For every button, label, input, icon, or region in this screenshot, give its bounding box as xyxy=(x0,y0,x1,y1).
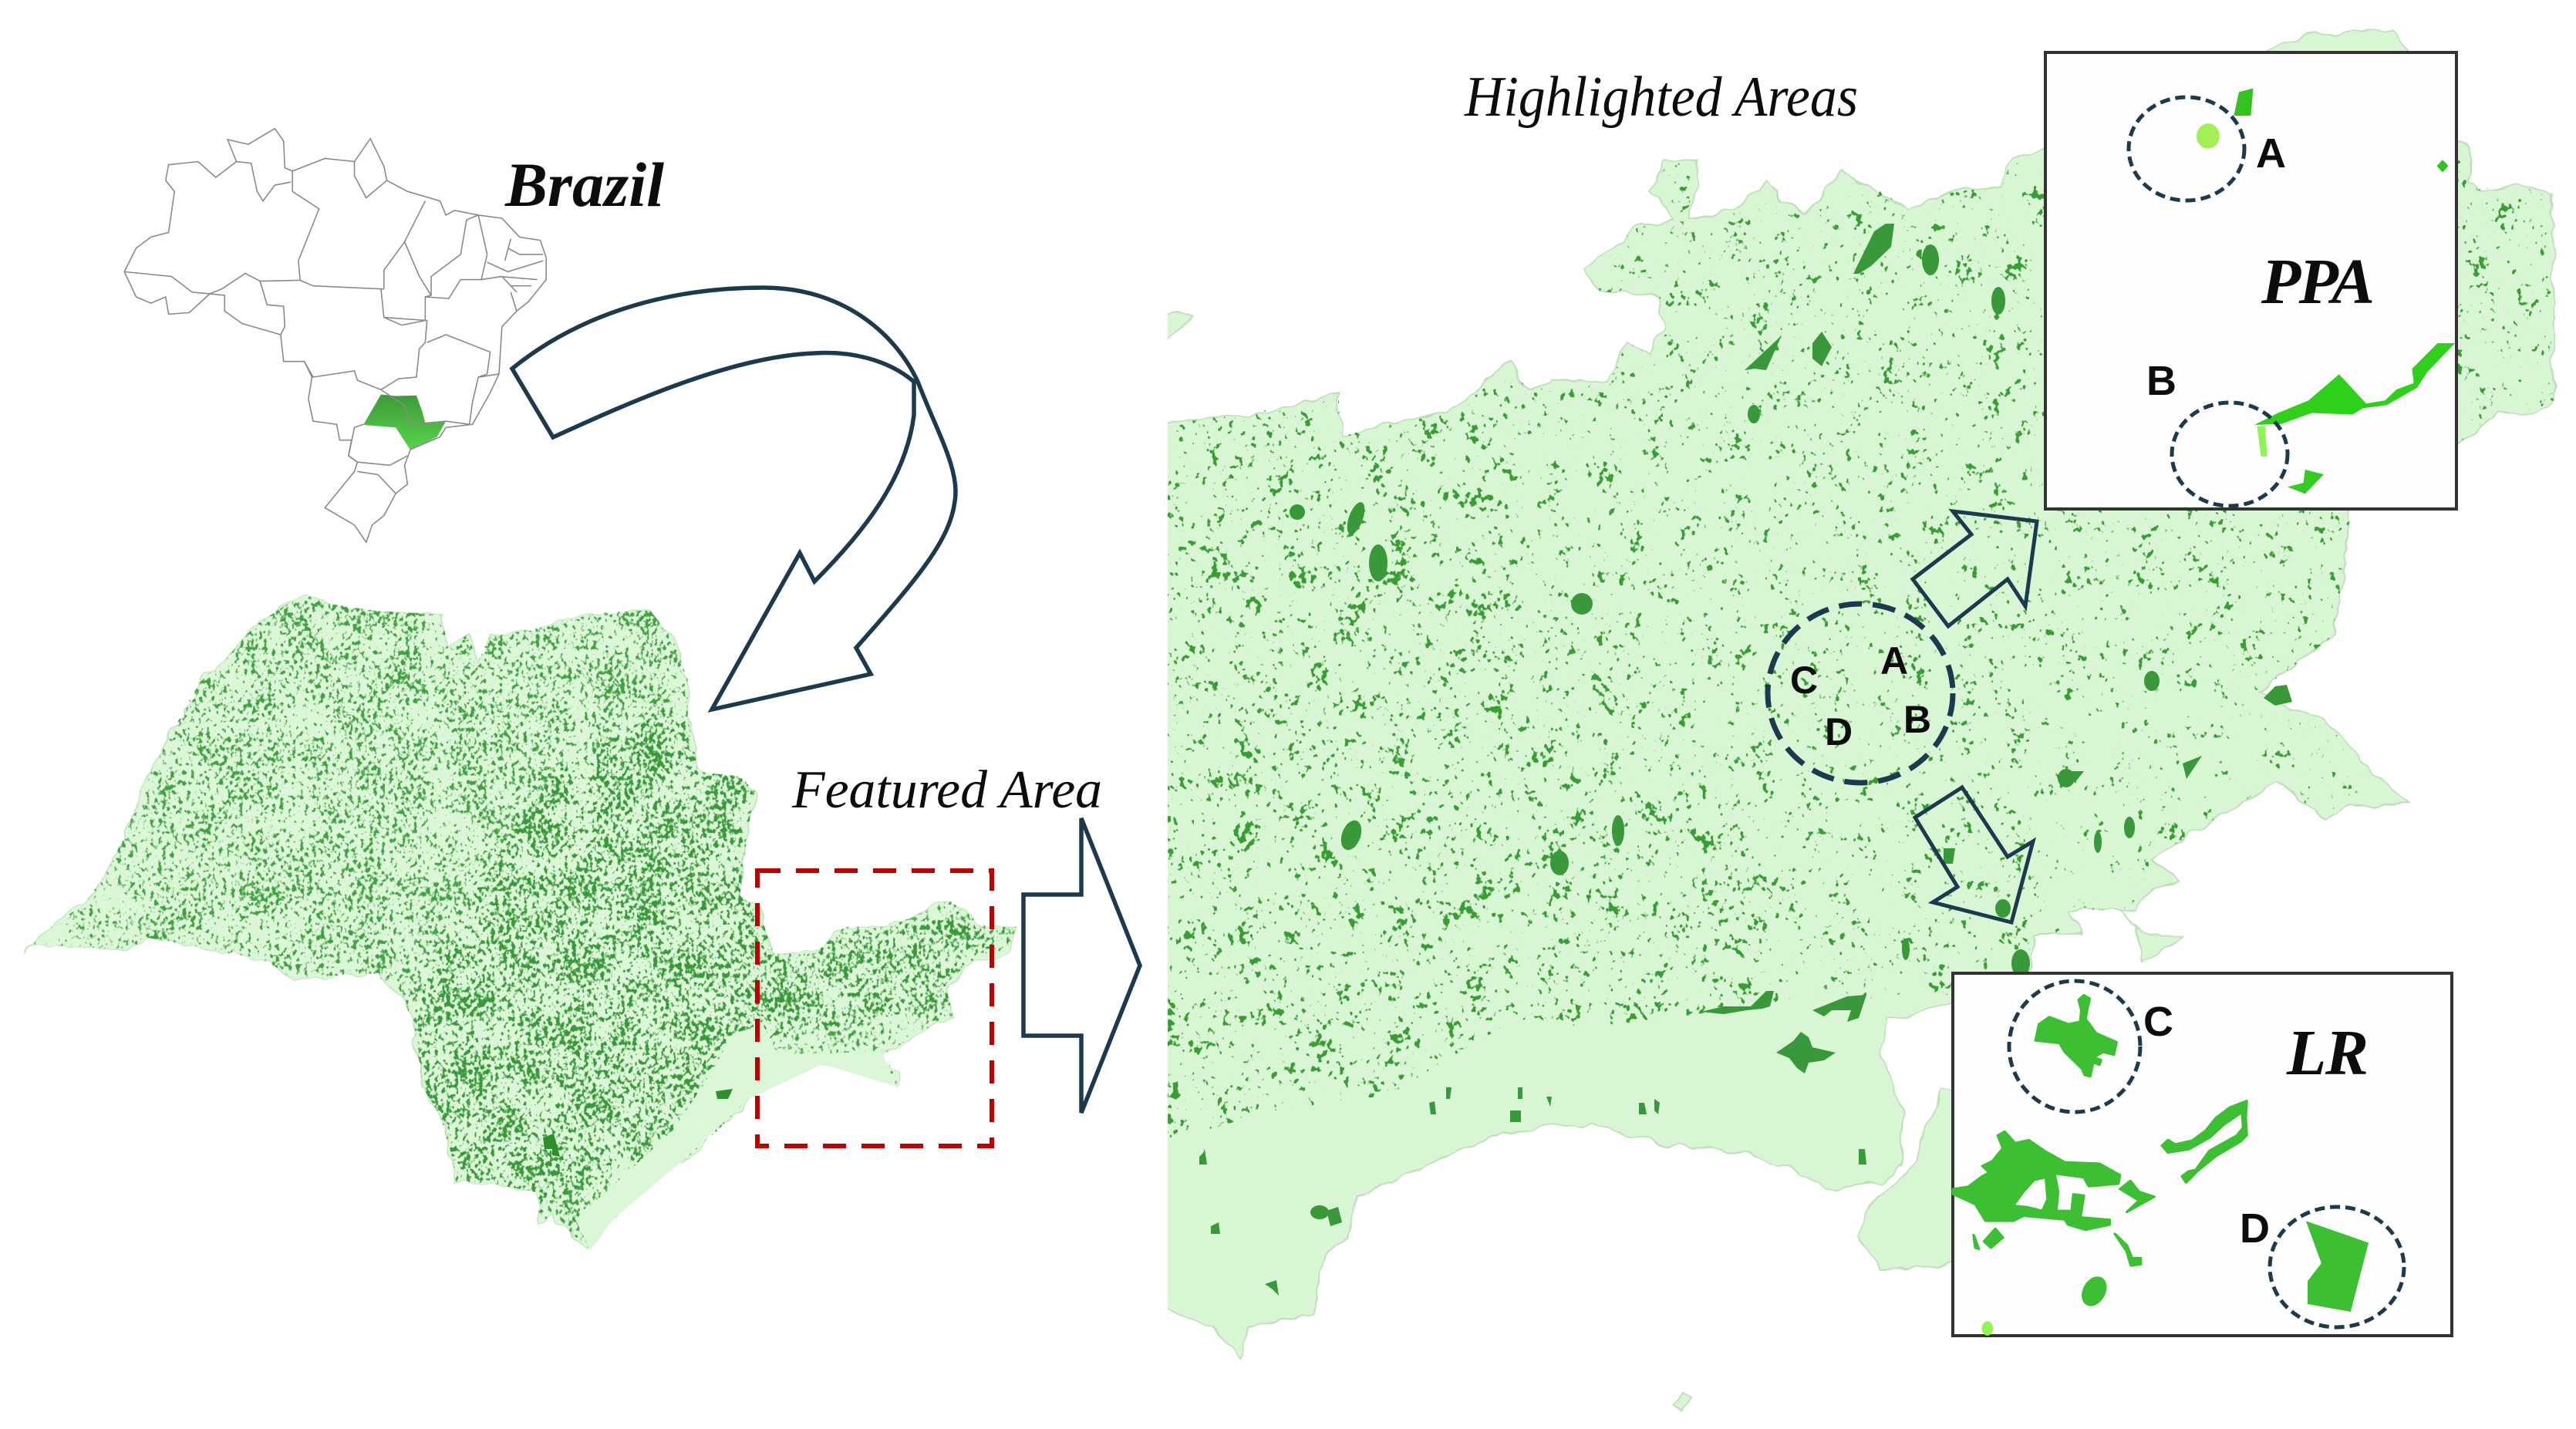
central dashed circle with site labels xyxy=(1768,604,1953,783)
coastal reserves xyxy=(1199,848,1955,1296)
inset frame xyxy=(2045,52,2456,509)
large dark patches xyxy=(1745,224,2292,783)
pale coast strip xyxy=(575,1026,897,1250)
site labels: A xyxy=(1880,639,1908,682)
vegetation speckle xyxy=(0,594,1033,1272)
dashed circle xyxy=(1768,604,1953,783)
panel: LR inset xyxy=(1953,973,2452,1336)
site labels: C xyxy=(1790,659,1818,702)
title PPA: PPA xyxy=(2261,246,2375,318)
land base xyxy=(1157,31,2554,1413)
dashed circle C xyxy=(2009,981,2140,1112)
dashed circle D xyxy=(2270,1207,2404,1327)
map: enlarged featured area xyxy=(1157,31,2556,1413)
site labels: B xyxy=(1903,698,1931,741)
map: São Paulo state with vegetation speckle xyxy=(0,594,1033,1272)
heading: Brazil: Brazil xyxy=(504,150,664,220)
panel: PPA inset xyxy=(2045,52,2456,509)
inset vegetation shapes xyxy=(2197,88,2455,494)
inset frame xyxy=(1953,973,2452,1336)
title LR: LR xyxy=(2286,1017,2369,1089)
state borders xyxy=(124,162,543,494)
dashed circle A xyxy=(2129,97,2244,201)
label: Highlighted Areas: Highlighted Areas xyxy=(1464,66,1858,129)
Brazil outer outline xyxy=(124,129,546,542)
label B: B xyxy=(2146,358,2176,404)
label A: A xyxy=(2256,130,2286,177)
arrow: to LR inset xyxy=(1915,787,2033,922)
red dashed selection box xyxy=(757,871,992,1146)
label C: C xyxy=(2143,999,2173,1045)
mid-size vegetation patches xyxy=(1290,244,2160,1219)
arrow: to PPA inset xyxy=(1913,511,2037,626)
state land base xyxy=(24,595,1017,1250)
block arrow: to enlarged area xyxy=(1023,818,1140,1113)
São Paulo state highlighted xyxy=(363,394,446,450)
vegetation speckle xyxy=(1168,154,2556,1149)
label D: D xyxy=(2240,1205,2270,1252)
site labels xyxy=(1790,639,1931,753)
label: Featured Area: Featured Area xyxy=(791,760,1102,820)
inset reserve shapes xyxy=(1953,995,2369,1336)
curved arrow: Brazil to São Paulo xyxy=(512,288,956,709)
site labels: D xyxy=(1825,710,1853,753)
dashed circle B xyxy=(2172,403,2288,506)
map: Brazil states xyxy=(124,129,546,542)
dark reserve patches xyxy=(543,1089,733,1157)
